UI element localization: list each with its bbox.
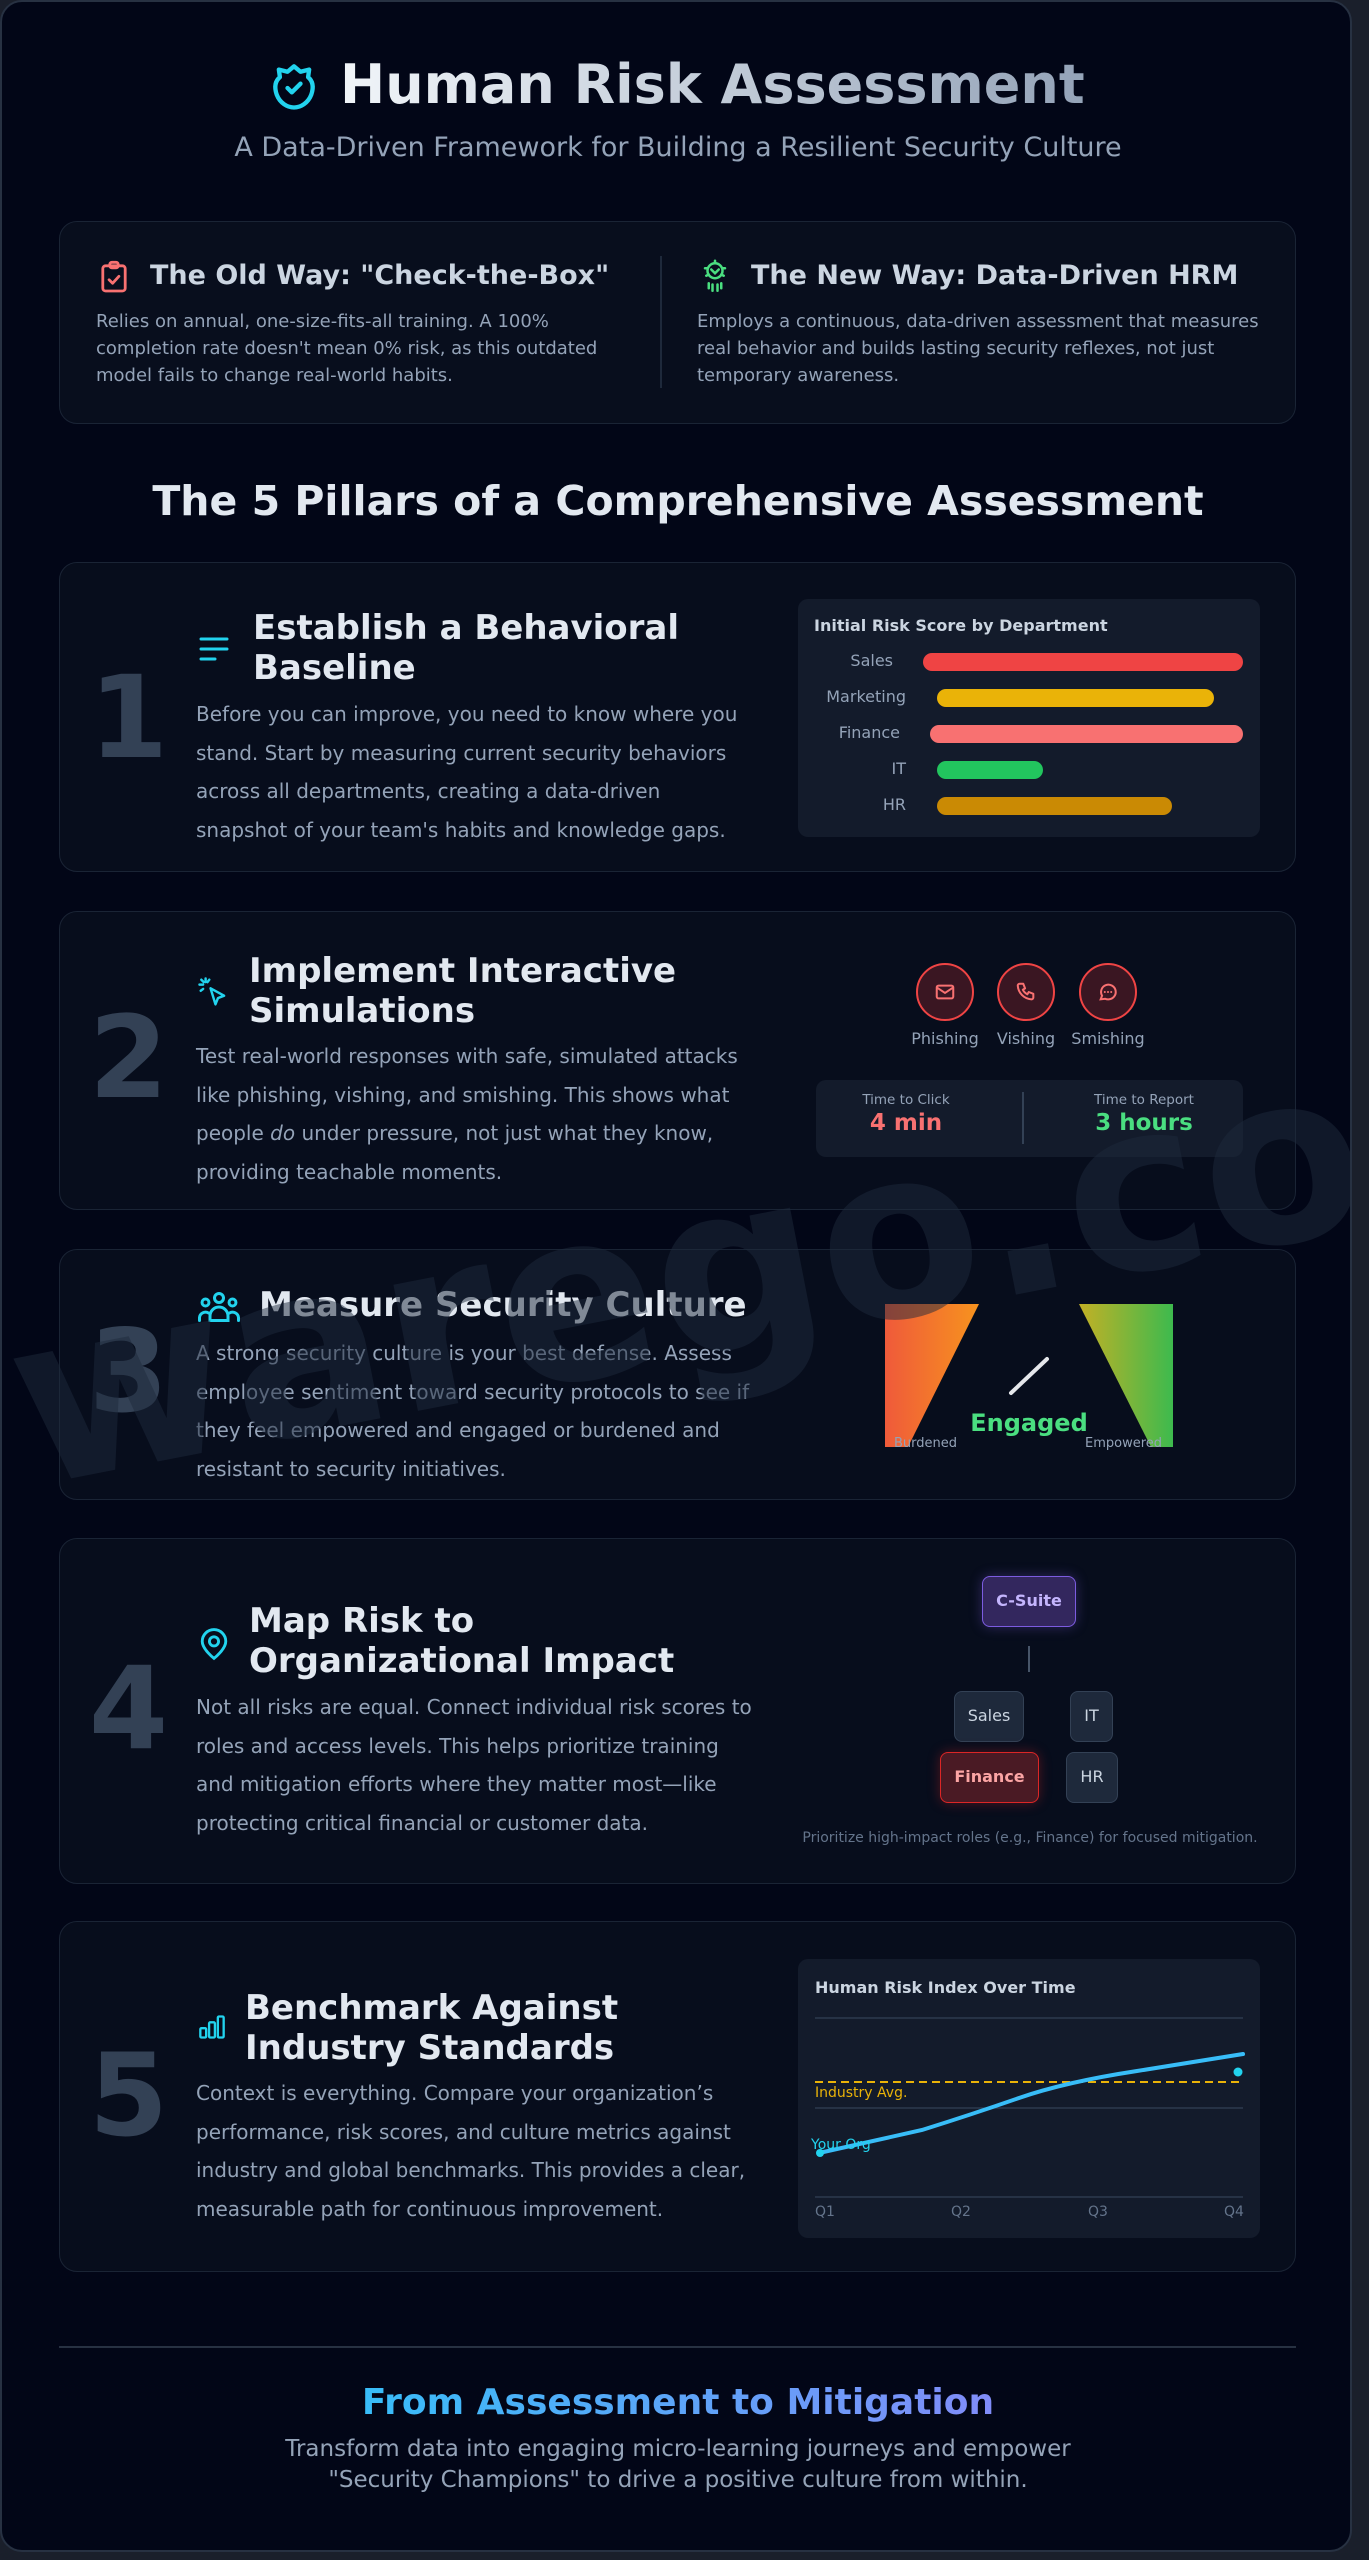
text: stand. Start by measuring current security behaviors [196,740,726,764]
gauge: Burdened [894,1436,957,1451]
footer text: Transform data into engaging micro-learning journeys and empower [285,2436,1071,2462]
text [196,1044,738,1184]
text: industry and global benchmarks. This provides a clear, [196,2158,745,2182]
icon: brain/bug [704,260,726,292]
stats box: Time to Report [1094,1092,1194,1108]
box: Finance [940,1752,1039,1803]
box: HR: HR [1080,1767,1104,1786]
attack icons: Smishing [1071,1029,1145,1048]
panel: pillar 1 [59,562,1296,872]
footer [285,2382,1071,2493]
icon: lines [200,638,228,660]
line chart [798,1959,1260,2238]
heading [249,1601,674,1681]
text: A strong security culture is your best defense. Assess [196,1341,732,1365]
icon: map pin [200,1628,228,1660]
icon: click [198,977,226,1006]
bar chart: Marketing [826,687,906,706]
line chart: Your Org [810,2137,871,2153]
box: C-Suite: C-Suite [996,1591,1062,1610]
line chart: Q2 [951,2204,971,2220]
text: real behavior and builds lasting security reflexes, not just [697,338,1214,359]
number: 2 [89,991,168,1124]
gauge: Empowered [1085,1436,1162,1451]
text: performance, risk scores, and culture metrics against [196,2120,731,2144]
text [196,1695,752,1834]
number: 5 [89,2029,168,2162]
text: Relies on annual, one-size-fits-all training. A 100% [96,311,549,332]
heading [253,608,679,688]
heading: The Old Way: "Check-the-Box" [150,260,609,291]
icon: shield [273,64,315,110]
text: snapshot of your team's habits and knowledge gaps. [196,818,726,842]
text: Before you can improve, you need to know where you [196,702,737,726]
old way [96,260,609,386]
text: employee sentiment toward security protocols to see if [196,1380,749,1404]
text [196,1341,750,1480]
text: roles and access levels. This helps prioritize training [196,1734,719,1758]
line chart: Q3 [1088,2204,1108,2220]
text [96,311,597,386]
footer heading: From Assessment to Mitigation [362,2382,994,2423]
line chart: Industry Avg. [815,2085,907,2101]
text: completion rate doesn't mean 0% risk, as this outdated [96,338,597,359]
attack icons: Phishing [911,1029,979,1048]
text [697,311,1259,386]
box: C-Suite [982,1576,1076,1627]
text: Not all risks are equal. Connect individual risk scores to [196,1695,752,1719]
box: Sales: Sales [968,1706,1010,1725]
heading: Organizational Impact [249,1641,674,1681]
gauge [885,1304,1173,1451]
text: protecting critical financial or customer data. [196,1810,648,1834]
bar chart: Initial Risk Score by Department [814,616,1108,635]
caption: Prioritize high-impact roles (e.g., Finance) for focused mitigation. [802,1830,1258,1846]
org chart [802,1570,1258,1846]
heading [245,1988,618,2068]
section heading: The 5 Pillars of a Comprehensive Assessment [152,477,1204,525]
gauge: Engaged [970,1409,1088,1437]
text: measurable path for continuous improvement. [196,2196,663,2220]
text [196,702,737,842]
heading: Benchmark Against [245,1988,618,2028]
stats box: Time to Click [862,1092,950,1108]
text: like phishing, vishing, and smishing. This shows what [196,1082,729,1106]
bar chart: IT [892,759,906,778]
stats box [816,1080,1243,1157]
line chart: Human Risk Index Over Time [815,1978,1076,1997]
icon: clipboard [101,260,127,292]
stats box: 4 min [870,1110,942,1136]
number: 4 [89,1642,168,1775]
icon: phone [997,963,1055,1021]
heading: Baseline [253,648,416,688]
text: Context is everything. Compare your organization’s [196,2081,713,2105]
header [234,53,1122,163]
text [196,2081,745,2220]
box: Finance: Finance [954,1767,1025,1786]
text: temporary awareness. [697,365,899,386]
icon: users [198,1292,240,1322]
box: IT [1070,1691,1113,1742]
text: Employs a continuous, data-driven assessment that measures [697,311,1259,332]
box: HR [1066,1752,1118,1803]
heading: The New Way: Data-Driven HRM [751,260,1238,291]
new way [697,260,1259,386]
panel: pillar 4 [59,1538,1296,1884]
text: Test real-world responses with safe, simulated attacks [196,1044,738,1068]
panel: pillar 2 [59,911,1296,1210]
heading: Implement Interactive [249,951,676,991]
attack icons [911,963,1145,1048]
bar chart: HR [883,795,906,814]
heading: Measure Security Culture [259,1285,747,1325]
heading: Simulations [249,991,475,1031]
line chart: Q4 [1224,2204,1244,2220]
subtitle: A Data-Driven Framework for Building a Resilient Security Culture [234,132,1122,163]
bar chart [798,599,1260,837]
line chart: Q1 [815,2204,835,2220]
heading [249,951,676,1031]
stats box: 3 hours [1095,1110,1193,1136]
text: resistant to security initiatives. [196,1456,506,1480]
bar chart: Finance [839,723,900,742]
attack icons: Vishing [997,1029,1055,1048]
text: across all departments, creating a data-driven [196,779,660,803]
icon: chat [1079,963,1137,1021]
text: model fails to change real-world habits. [96,365,453,386]
panel: pillar 5 [59,1921,1296,2272]
heading: Industry Standards [245,2028,614,2068]
icon: bar chart [199,2015,225,2039]
icon: email [916,963,974,1021]
bar chart: Sales [850,651,893,670]
text: they feel empowered and engaged or burdened and [196,1418,720,1442]
footer text [285,2436,1071,2493]
footer text: "Security Champions" to drive a positive culture from within. [328,2467,1028,2493]
box: IT: IT [1084,1706,1099,1725]
panel: pillar 3 [59,1249,1296,1500]
heading: Map Risk to [249,1601,474,1641]
title: Human Risk Assessment [340,53,1085,116]
number: 3 [89,1305,168,1438]
text: and mitigation efforts where they matter most—like [196,1772,717,1796]
heading: Establish a Behavioral [253,608,679,648]
box: Sales [954,1691,1024,1742]
text: people do under pressure, not just what they know, [196,1121,713,1145]
number: 1 [89,651,168,784]
panel: old vs new [59,221,1296,424]
text: providing teachable moments. [196,1160,502,1184]
